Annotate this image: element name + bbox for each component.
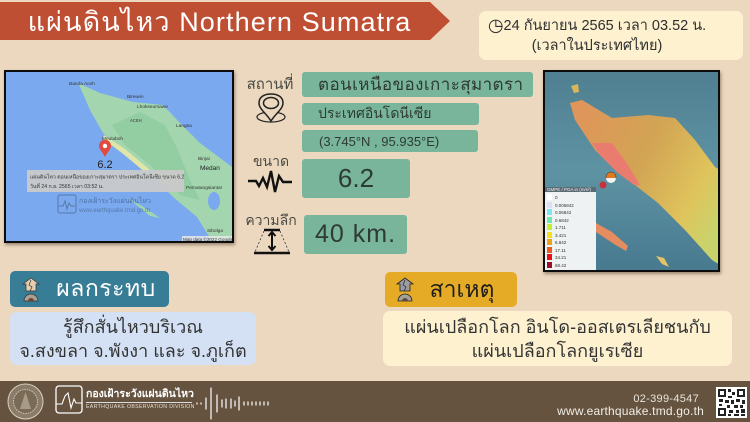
legend: 0	[555, 195, 558, 200]
icon: damaged building	[396, 278, 414, 302]
impact text box	[10, 312, 256, 365]
panel: location map	[4, 70, 234, 243]
panel: location map: Pematangsiantar	[186, 185, 223, 191]
date and time box: (เวลาในประเทศไทย)	[532, 38, 662, 54]
location name	[302, 72, 533, 97]
coordinates: (3.745°N , 95.935°E)	[319, 134, 439, 148]
watermark logo	[58, 195, 151, 214]
website: www.earthquake.tmd.go.th	[557, 404, 704, 418]
location label: สถานที่	[247, 76, 293, 93]
panel: location map: ACEH	[130, 118, 142, 123]
panel: location map: Banda Aceh	[69, 81, 95, 87]
legend: 17.11	[555, 248, 566, 253]
logo: department seal	[8, 384, 44, 420]
logo: division mark	[55, 385, 83, 414]
legend: 0.6842	[555, 218, 569, 223]
magnitude label: 6.2	[97, 159, 113, 171]
panel: location map: Binjai	[198, 156, 210, 162]
cause text box: แผ่นเปลือกโลกยูเรเซีย	[472, 340, 643, 360]
cause text box	[383, 311, 732, 366]
phone number: 02-399-4547	[633, 393, 699, 405]
icon: depth	[254, 228, 290, 254]
legend: 1.711	[555, 225, 566, 230]
division name: EARTHQUAKE OBSERVATION DIVISION	[86, 404, 195, 410]
sound wave decoration	[196, 387, 269, 420]
watermark logo: กองเฝ้าระวังแผ่นดินไหว	[79, 196, 151, 205]
legend: 0.006842	[555, 203, 574, 208]
caption box	[27, 170, 185, 192]
caption box: วันที่ 24 ก.ย. 2565 เวลา 03:52 น.	[30, 183, 104, 190]
coordinates	[302, 130, 478, 152]
panel: location map: Medan	[200, 165, 220, 172]
marker: epicentre	[600, 182, 606, 188]
date and time box	[479, 11, 743, 60]
impact text box: รู้สึกสั่นไหวบริเวณ	[63, 316, 203, 336]
depth value: 40 km.	[315, 220, 396, 248]
country	[302, 103, 479, 125]
panel: location map: Lhokseumawe	[137, 104, 168, 110]
impact heading text: ผลกระทบ	[56, 275, 156, 301]
depth value	[304, 215, 407, 254]
icon: seismic wave	[248, 170, 292, 192]
land: shaking intensity	[570, 100, 720, 265]
magnitude value	[302, 159, 410, 198]
division name	[86, 387, 195, 410]
magnitude label: ขนาด	[253, 153, 289, 169]
QR code	[716, 387, 747, 418]
legend	[545, 187, 596, 270]
legend: 68.42	[555, 263, 567, 268]
legend: 6.842	[555, 240, 567, 245]
land: Sumatra	[78, 83, 234, 243]
title text: แผ่นดินไหว Northern Sumatra	[28, 6, 411, 36]
panel: location map: Map data ©2022 Google	[183, 236, 234, 242]
watermark logo: www.earthquake.tmd.go.th	[78, 208, 150, 214]
panel: location map: Langsa	[176, 123, 192, 129]
panel: location map: Meulaboh	[102, 136, 123, 142]
country: ประเทศอินโดนีเซีย	[318, 105, 431, 121]
impact heading	[10, 271, 169, 307]
marker: epicentre pin	[99, 140, 111, 157]
marker: focal mechanism	[606, 172, 616, 183]
legend: 3.421	[555, 233, 567, 238]
depth label: ความลึก	[245, 212, 297, 228]
magnitude value: 6.2	[338, 163, 374, 193]
panel: location map: Bireuen	[127, 94, 144, 100]
legend: 0.06842	[555, 210, 572, 215]
icon: damaged building	[22, 278, 40, 302]
panel: shake map	[543, 70, 720, 272]
footer bar	[0, 381, 750, 422]
cause heading text: สาเหตุ	[430, 276, 494, 302]
date and time box: ◷24 กันยายน 2565 เวลา 03.52 น.	[488, 14, 706, 34]
title banner	[0, 2, 450, 40]
cause text box: แผ่นเปลือกโลก อินโด-ออสเตรเลียชนกับ	[404, 316, 711, 336]
legend: GMPE / PGA in (m/s²)	[547, 187, 592, 192]
legend: 34.21	[555, 255, 567, 260]
cause heading	[385, 272, 517, 307]
icon: location pin	[256, 93, 286, 123]
division name: กองเฝ้าระวังแผ่นดินไหว	[86, 388, 194, 400]
location name: ตอนเหนือของเกาะสุมาตรา	[318, 75, 523, 94]
caption box: แผ่นดินไหว ตอนเหนือของเกาะสุมาตรา ประเทศอินโดนีเซีย ขนาด 6.2	[30, 172, 185, 180]
impact text box: จ.สงขลา จ.พังงา และ จ.ภูเก็ต	[19, 340, 247, 360]
panel: location map: Sibolga	[207, 228, 223, 234]
